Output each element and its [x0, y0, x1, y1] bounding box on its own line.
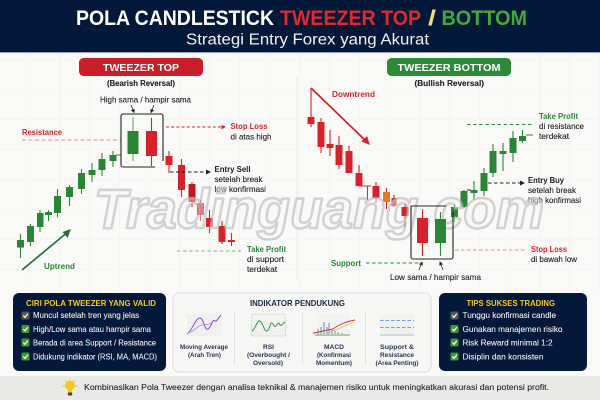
- indicator: moving average: (Arah Tren): [188, 352, 221, 359]
- uptrend candles: [17, 151, 121, 258]
- subheading: bullish reversal: (Bullish Reversal): [414, 79, 484, 88]
- heading: INDIKATOR PENDUKUNG: [250, 299, 345, 308]
- entry buy label: setelah break: [528, 186, 577, 195]
- label: low sama: Low sama / hampir sama: [390, 273, 482, 282]
- resistance level: [22, 128, 121, 140]
- indicator: macd: [313, 314, 355, 367]
- title: [76, 6, 527, 30]
- entry buy label: high konfirmasi: [528, 196, 581, 205]
- indicator: moving average: [180, 314, 228, 359]
- entry sell label: low konfirmasi: [214, 185, 266, 194]
- indicator: support and resistance: [376, 314, 418, 367]
- take profit line: [467, 124, 533, 126]
- uptrend candles after bottom: [451, 130, 533, 222]
- uptrend arrow: [22, 229, 71, 270]
- indicator: support and resistance: (Area Penting): [376, 360, 418, 367]
- stop loss line: [455, 249, 526, 251]
- support level: [331, 259, 420, 268]
- indicator: rsi: Oversold): [253, 360, 283, 367]
- checklist: High/Low sama atau hampir sama: [33, 325, 152, 334]
- arrows: to lows: [419, 262, 443, 270]
- title: BOTTOM: [442, 6, 527, 30]
- header band: [0, 0, 600, 53]
- checklist: Tunggu konfirmasi candle: [462, 311, 557, 320]
- take profit label: terdekat: [539, 132, 570, 141]
- entry buy label: Entry Buy: [528, 176, 565, 185]
- take profit label: [539, 112, 585, 141]
- subheading: bearish reversal: (Bearish Reversal): [107, 79, 175, 88]
- support level: Support: [331, 259, 361, 268]
- stop loss label: [531, 245, 577, 264]
- tweezer bottom candles: [417, 209, 446, 256]
- checklist: Risk Reward minimal 1:2: [462, 338, 553, 348]
- badge: tweezer bottom: TWEEZER BOTTOM: [398, 62, 501, 74]
- title: /: [428, 6, 436, 30]
- tweezer top candles: [128, 117, 157, 166]
- subtitle: Strategi Entry Forex yang Akurat: [186, 32, 430, 48]
- indicator: moving average: Moving Average: [180, 344, 228, 351]
- indicator: macd: Momentum): [316, 360, 352, 367]
- checklist: [22, 311, 157, 362]
- badge: tweezer bottom: [387, 58, 511, 76]
- label: high sama: High sama / hampir sama: [100, 96, 192, 104]
- panel: ciri pola tweezer: [13, 293, 166, 371]
- panel: indikator pendukung: [173, 293, 431, 372]
- indicator: support and resistance: Resistance: [380, 352, 414, 359]
- resistance level: Resistance: [22, 128, 63, 137]
- indicator: rsi: RSI: [263, 344, 274, 351]
- checklist: Berada di area Support / Resistance: [33, 338, 157, 348]
- take profit label: di support: [247, 255, 285, 264]
- panel: tweezer top chart: [17, 58, 286, 274]
- watermark: Tradinguang.com: [94, 177, 544, 240]
- stop loss label: di bawah low: [531, 255, 577, 264]
- take profit label: di resistance: [539, 122, 585, 131]
- checklist: Disiplin dan konsisten: [462, 352, 544, 362]
- indicator: macd: (Konfirmasi: [317, 352, 351, 359]
- stop loss label: [230, 122, 272, 142]
- indicator: rsi: [247, 314, 290, 367]
- panel: tweezer bottom chart: [308, 58, 585, 282]
- tweezer bottom box: [411, 206, 453, 259]
- stop loss label: Stop Loss: [230, 122, 268, 131]
- panel divider: [296, 76, 298, 280]
- tweezer top box: [121, 114, 163, 167]
- entry sell label: [214, 165, 266, 194]
- entry sell label: setelah break: [214, 175, 263, 184]
- arrows: to highs: [131, 105, 154, 112]
- badge: tweezer top: [79, 58, 203, 76]
- take profit line: [177, 250, 241, 252]
- heading: CIRI POLA TWEEZER YANG VALID: [26, 299, 156, 308]
- stop loss label: Stop Loss: [531, 245, 568, 254]
- entry buy label: [528, 176, 581, 205]
- take profit label: Take Profit: [539, 112, 578, 121]
- icon: light bulb: [62, 378, 78, 396]
- downtrend candles after top: [166, 151, 235, 246]
- checklist: Gunakan manajemen risiko: [462, 325, 563, 334]
- footer text: Kombinasikan Pola Tweezer dengan analisa teknikal & manajemen risiko untuk meningkatkan akurasi dan potensi profit.: [84, 382, 549, 392]
- downtrend arrow: [311, 88, 370, 145]
- title: POLA CANDLESTICK: [76, 6, 274, 30]
- checklist: Didukung indikator (RSI, MA, MACD): [33, 352, 157, 362]
- label: uptrend: Uptrend: [44, 262, 75, 271]
- entry sell line: [170, 171, 210, 173]
- checklist: [450, 311, 563, 362]
- checklist: Muncul setelah tren yang jelas: [33, 311, 139, 320]
- indicator: macd: MACD: [324, 344, 344, 351]
- title: TWEEZER TOP: [280, 6, 421, 30]
- indicator: support and resistance: Support &: [380, 344, 414, 351]
- downtrend candles: [308, 88, 408, 227]
- panel: tips sukses trading: [439, 293, 587, 371]
- take profit label: terdekat: [247, 265, 278, 274]
- footer band: [0, 376, 600, 400]
- stop loss line: [166, 126, 225, 128]
- heading: TIPS SUKSES TRADING: [466, 299, 555, 308]
- stop loss label: di atas high: [230, 132, 272, 142]
- take profit label: [247, 245, 286, 274]
- indicator: rsi: (Overbought /: [247, 352, 290, 359]
- label: downtrend: Downtrend: [332, 90, 375, 99]
- take profit label: Take Profit: [247, 245, 286, 254]
- badge: tweezer top: TWEEZER TOP: [103, 62, 179, 74]
- entry sell label: Entry Sell: [214, 165, 250, 174]
- entry buy line: [488, 182, 524, 184]
